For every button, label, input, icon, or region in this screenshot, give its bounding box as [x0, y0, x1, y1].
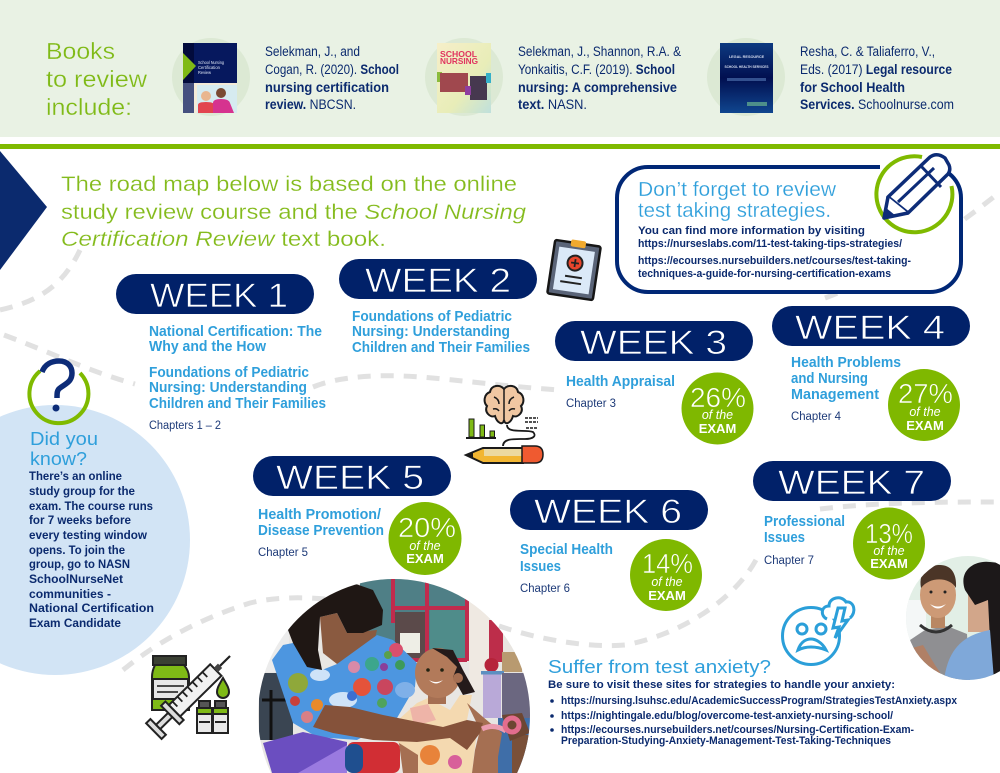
callout heading: Don’t forget to review: [638, 178, 836, 201]
badge: 26% of the exam: 26%: [690, 382, 746, 413]
icon: clipboard: [547, 237, 601, 300]
text block: suffer from test anxiety: Be sure to visit these sites for strategies to handle your anxiety:: [548, 679, 895, 691]
panel: week 4: WEEK 4: [795, 309, 945, 347]
heading: books to review: include:: [46, 94, 132, 120]
panel: week 1: Why and the How: [149, 339, 267, 355]
panel: week 1: Children and Their Families: [149, 396, 326, 412]
intro text: road map: study review course and the School Nursing: [61, 200, 526, 224]
intro text: road map: [61, 172, 526, 251]
did you know heading: know?: [30, 448, 87, 469]
heading: books to review: to review: [46, 66, 148, 92]
did you know body: Exam Candidate: [29, 616, 121, 630]
intro text: road map: The road map below is based on the online: [61, 172, 517, 196]
citation: legal resource: [800, 44, 954, 112]
panel: week 3: WEEK 3: [580, 324, 727, 362]
nurse forearm and hand: [313, 705, 530, 750]
panel: week 4: Health Problems: [791, 355, 901, 371]
book cover: legal resource: LEGAL RESOURCE: [729, 55, 765, 59]
badge: 13% of the exam: of the: [873, 544, 905, 558]
panel: week 7: [753, 461, 951, 580]
did you know body: study group for the: [29, 484, 135, 498]
badge: 14% of the exam: 14%: [642, 548, 693, 579]
panel: week 7: Issues: [764, 530, 805, 546]
book cover: legal resource: [707, 38, 785, 116]
text block: suffer from test anxiety: [548, 656, 957, 747]
icon: question mark in ring: [29, 361, 88, 423]
badge: 20% of the exam: [388, 502, 462, 575]
badge: 14% of the exam: EXAM: [648, 588, 686, 603]
panel: week 2: Nursing: Understanding: [352, 324, 510, 340]
panel: week 1: Chapters 1 – 2: [149, 420, 221, 432]
panel: week 4: Management: [791, 387, 879, 403]
panel: did you know: [0, 361, 190, 675]
callout heading: test taking strategies.: [638, 199, 831, 222]
panel: week 1: National Certification: The: [149, 324, 322, 340]
panel: week 5: [253, 456, 462, 575]
panel: week 7: Professional: [764, 514, 845, 530]
citation: comprehensive text: Yonkaitis, C.F. (2019). School: [518, 62, 675, 77]
panel: week 1: WEEK 1: [150, 277, 288, 315]
icon: brain and pencil: [466, 386, 543, 463]
book cover: legal resource: SCHOOL HEALTH SERVICES: [724, 65, 769, 69]
did you know body: There’s an online: [29, 469, 122, 483]
chair: [345, 742, 400, 773]
callout links: You can find more information by visiting: [638, 225, 865, 237]
book cover: certification review: Review: [198, 70, 212, 75]
link list: https://nightingale.edu/blog/overcome-test-anxiety-nursing-school/: [561, 710, 893, 722]
panel: week 1: Foundations of Pediatric: [149, 365, 309, 381]
panel: week 6: WEEK 6: [534, 493, 682, 531]
citation: legal resource: Eds. (2017) Legal resource: [800, 62, 952, 77]
did you know heading: [30, 428, 98, 469]
panel: week 2: [339, 259, 537, 356]
icon: medicine bottle and syringe: [145, 647, 239, 740]
did you know body: group, go to NASN: [29, 557, 130, 571]
panel: week 1: [116, 274, 326, 432]
photo: nurse with young girl: [258, 579, 530, 773]
heading: books to review: [46, 38, 148, 120]
did you know body: opens. To join the: [29, 543, 125, 557]
link list: [550, 695, 957, 747]
badge: 20% of the exam: of the: [409, 539, 441, 553]
badge: 14% of the exam: [630, 539, 702, 611]
arrow marker: navy triangle: [0, 151, 47, 270]
panel: week 6: Chapter 6: [520, 583, 570, 595]
panel: week 4: and Nursing: [791, 371, 868, 387]
book cover: certification review: Certification: [198, 65, 221, 70]
panel: week 5: Chapter 5: [258, 547, 308, 559]
panel: week 4: Chapter 4: [791, 411, 842, 423]
badge: 27% of the exam: EXAM: [906, 418, 944, 433]
badge: 13% of the exam: 13%: [865, 518, 913, 549]
panel: books to review band: [0, 0, 1000, 137]
panel: week 6: Issues: [520, 559, 561, 575]
panel: week 3: [555, 321, 754, 444]
link list: https://nursing.lsuhsc.edu/AcademicSuccessProgram/StrategiesTestAnxiety.aspx: [561, 695, 957, 707]
badge: 20% of the exam: 20%: [398, 512, 456, 543]
citation: comprehensive text: text. NASN.: [518, 97, 587, 112]
citation: comprehensive text: nursing: A comprehensive: [518, 80, 677, 95]
panel: week 5: Disease Prevention: [258, 523, 384, 539]
panel: week 1: Nursing: Understanding: [149, 380, 307, 396]
panel: week 7: WEEK 7: [778, 464, 925, 502]
panel: week 7: Chapter 7: [764, 555, 814, 567]
panel: week 2: Children and Their Families: [352, 340, 530, 356]
callout: test taking strategies: [617, 155, 961, 292]
panel: week 3: Chapter 3: [566, 398, 616, 410]
icon: anxious face: [782, 598, 854, 664]
citation: legal resource: Services. Schoolnurse.com: [800, 97, 954, 112]
callout heading: [638, 178, 836, 222]
did you know body: every testing window: [29, 528, 148, 542]
icon: pencil in green ring: [876, 155, 952, 232]
citation: legal resource: Resha, C. & Taliaferro, V.,: [800, 44, 935, 59]
text block: suffer from test anxiety: Suffer from test anxiety?: [548, 656, 771, 677]
citation: certification review: Cogan, R. (2020). School: [265, 62, 399, 77]
badge: 14% of the exam: of the: [651, 575, 683, 589]
badge: 13% of the exam: EXAM: [870, 556, 908, 571]
panel: week 3: Health Appraisal: [566, 374, 675, 390]
citation: certification review: review. NBCSN.: [265, 97, 356, 112]
badge: 27% of the exam: [888, 369, 960, 441]
link list: https://ecourses.nursebuilders.net/courses/Nursing-Certification-Exam-: [561, 724, 914, 736]
citation: certification review: [265, 44, 399, 112]
did you know body: for 7 weeks before: [29, 513, 131, 527]
citation: legal resource: for School Health: [800, 80, 905, 95]
callout links: https://nurseslabs.com/11-test-taking-tips-strategies/: [638, 238, 902, 250]
girl figure: [398, 648, 502, 773]
link list: Preparation-Studying-Anxiety-Management-Test-Taking-Techniques: [561, 735, 891, 747]
did you know body: National Certification: [29, 601, 154, 615]
green divider bar: [0, 144, 1000, 149]
panel: week 5: WEEK 5: [276, 459, 424, 497]
badge: 26% of the exam: of the: [702, 408, 733, 422]
did you know body: exam. The course runs: [29, 499, 153, 513]
citation: certification review: nursing certification: [265, 80, 389, 95]
did you know body: [29, 469, 154, 630]
callout links: https://ecourses.nursebuilders.net/courses/test-taking-: [638, 255, 911, 267]
panel: week 4: [772, 306, 970, 441]
panel: week 2: Foundations of Pediatric: [352, 309, 512, 325]
book cover: certification review: School Nursing: [198, 60, 224, 65]
heading: books to review: Books: [46, 38, 115, 64]
callout links: [638, 225, 911, 280]
badge: 26% of the exam: EXAM: [699, 421, 736, 436]
book cover: comprehensive text: NURSING: [440, 56, 478, 66]
panel: week 6: Special Health: [520, 542, 613, 558]
badge: 26% of the exam: [682, 372, 754, 444]
badge: 27% of the exam: 27%: [898, 378, 953, 409]
panel: week 5: Health Promotion/: [258, 507, 381, 523]
citation: certification review: Selekman, J., and: [265, 44, 360, 59]
citation: comprehensive text: [518, 44, 681, 112]
callout links: techniques-a-guide-for-nursing-certification-exams: [638, 268, 891, 280]
book cover: certification review: [172, 38, 250, 116]
dashed road map path: [0, 192, 1000, 670]
badge: 20% of the exam: EXAM: [406, 551, 444, 566]
panel: week 6: [510, 490, 708, 611]
badge: 13% of the exam: [853, 508, 925, 580]
intro text: road map: Certification Review text book.: [61, 227, 386, 251]
photo: boy with nurse: [906, 556, 1000, 680]
nurse figure: [263, 583, 417, 773]
did you know body: SchoolNurseNet: [29, 572, 123, 586]
panel: week 2: WEEK 2: [365, 262, 511, 300]
book cover: comprehensive text: [425, 38, 503, 116]
citation: comprehensive text: Selekman, J., Shannon, R.A. &: [518, 44, 681, 59]
did you know body: communities -: [29, 587, 111, 601]
badge: 27% of the exam: of the: [909, 405, 941, 419]
book cover: comprehensive text: SCHOOL: [440, 49, 477, 59]
did you know heading: Did you: [30, 428, 98, 449]
